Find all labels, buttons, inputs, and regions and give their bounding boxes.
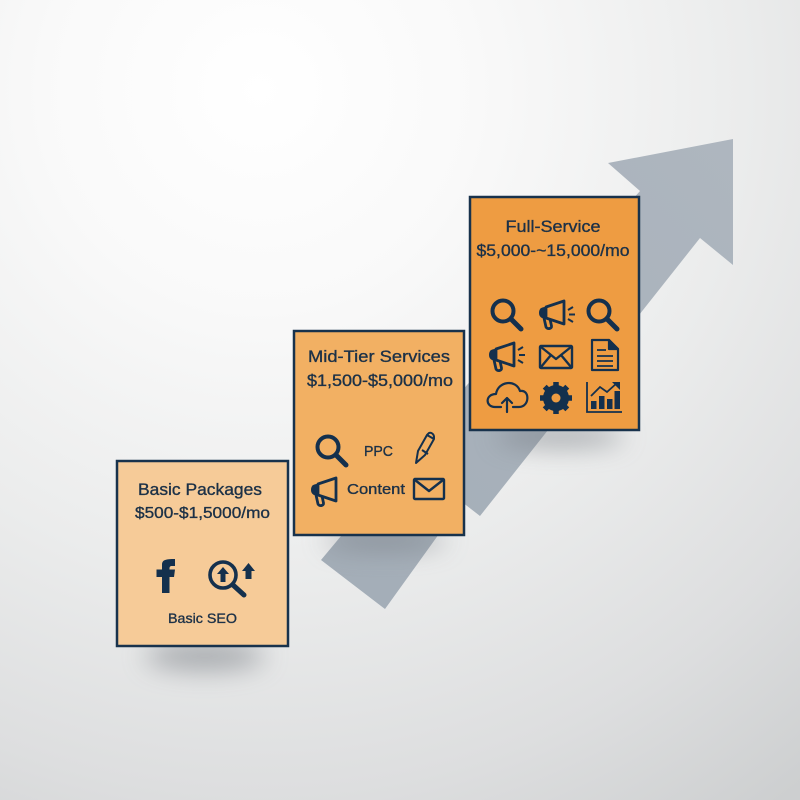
arrow bbox=[321, 139, 733, 609]
panel: mid-tier services bbox=[294, 331, 464, 535]
icon: document bbox=[592, 340, 618, 370]
icon: cloud upload bbox=[488, 383, 527, 412]
icon: megaphone 2 bbox=[489, 343, 525, 371]
heading: mid-tier services: Mid-Tier Services bbox=[308, 347, 450, 366]
icon: pen bbox=[416, 433, 434, 463]
icon: gear bbox=[540, 382, 572, 414]
icon: envelope bbox=[414, 479, 444, 499]
label: basic seo: Basic SEO bbox=[168, 610, 237, 626]
price: basic packages: $500-$1,5000/mo bbox=[135, 505, 270, 522]
heading: full-service: Full-Service bbox=[506, 217, 600, 236]
icon: search 1 bbox=[492, 300, 521, 329]
icon: megaphone 1 bbox=[539, 301, 575, 329]
icon: megaphone bbox=[311, 478, 336, 506]
icon: search with up arrows bbox=[210, 562, 255, 595]
panel: basic packages bbox=[117, 461, 288, 646]
price: full-service: $5,000-~15,000/mo bbox=[476, 242, 630, 260]
heading: basic packages: Basic Packages bbox=[138, 480, 262, 499]
card shadows bbox=[145, 425, 624, 670]
price: mid-tier services: $1,500-$5,000/mo bbox=[307, 372, 453, 390]
icon: facebook bbox=[156, 559, 175, 593]
icon: search 2 bbox=[588, 300, 617, 329]
icon: search bbox=[318, 436, 346, 465]
icon: envelope bbox=[540, 346, 572, 368]
icon: growth chart bbox=[587, 382, 622, 412]
panel: full-service bbox=[470, 197, 639, 430]
label: ppc: PPC bbox=[364, 444, 393, 460]
label: content: Content bbox=[347, 481, 406, 498]
